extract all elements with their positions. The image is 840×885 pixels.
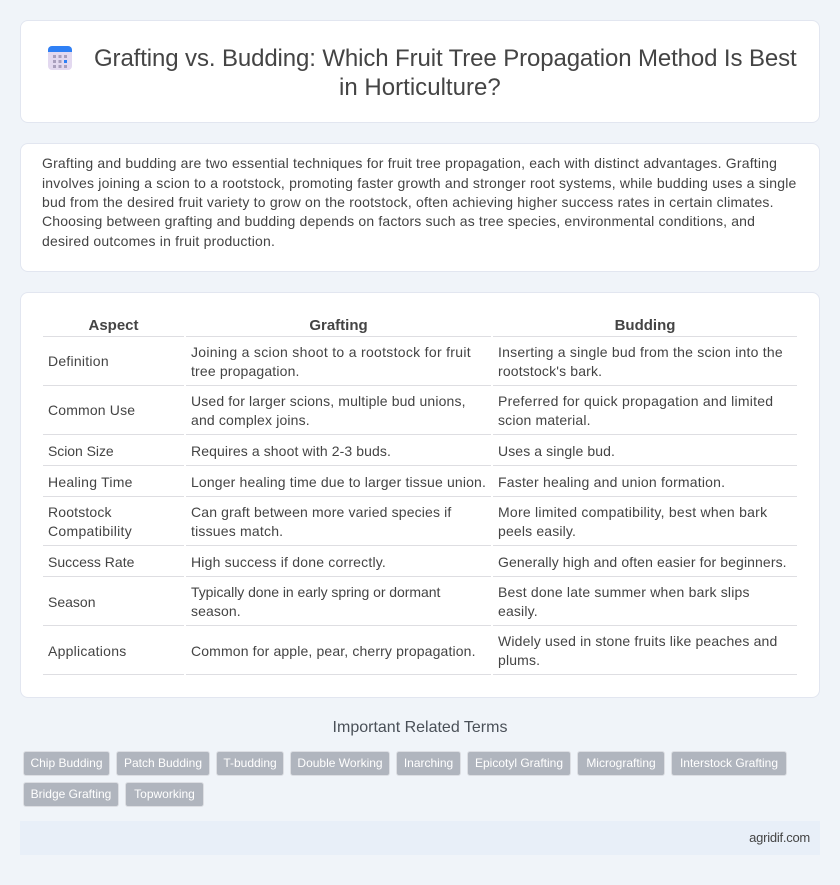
row: success rate: [48, 554, 787, 570]
row: healing time: Faster healing and union formation.: [498, 474, 725, 490]
row: definition: [48, 344, 783, 379]
table header: Grafting: [309, 317, 368, 334]
row: season: [48, 584, 750, 619]
tag list: related terms: Bridge Grafting: [31, 787, 111, 801]
row: common use: scion material.: [498, 412, 591, 428]
text block: introduction: desired outcomes in fruit production.: [42, 233, 275, 249]
title: Grafting vs. Budding: Which Fruit Tree Propagation Method Is Best: [94, 45, 797, 72]
row: rootstock compatibility: Rootstock: [48, 504, 112, 520]
tag list: related terms: Epicotyl Grafting: [475, 756, 563, 770]
row: healing time: Longer healing time due to larger tissue union.: [191, 474, 486, 490]
row: scion size: [48, 443, 615, 459]
row: definition: tree propagation.: [191, 363, 300, 379]
row: applications: Widely used in stone fruits like peaches and: [498, 633, 777, 649]
table header: [88, 317, 675, 334]
row: season: Season: [48, 594, 95, 610]
row: rootstock compatibility: [48, 504, 768, 539]
row: scion size: Requires a shoot with 2-3 buds.: [191, 443, 391, 459]
tag list: related terms: Micrografting: [586, 756, 656, 770]
tag list: related terms: Topworking: [134, 787, 195, 801]
tag list: related terms: [23, 751, 787, 807]
row: applications: Common for apple, pear, cherry propagation.: [191, 643, 476, 659]
row: definition: Joining a scion shoot to a rootstock for fruit: [191, 344, 471, 360]
tag list: related terms: Inarching: [404, 756, 453, 770]
row: scion size: Scion Size: [48, 443, 114, 459]
table header: Budding: [615, 317, 675, 334]
row: applications: Applications: [48, 643, 126, 659]
row: common use: Common Use: [48, 402, 135, 418]
table header: Aspect: [88, 317, 139, 334]
row: definition: rootstock's bark.: [498, 363, 602, 379]
heading: important related terms: Important Related Terms: [333, 719, 507, 736]
row: rootstock compatibility: peels easily.: [498, 523, 576, 539]
footer text: site name: agridif.com: [749, 830, 810, 845]
tag list: related terms: T-budding: [223, 756, 277, 770]
table: grafting vs budding comparison: [43, 317, 797, 675]
row: common use: Preferred for quick propagation and limited: [498, 393, 773, 409]
row: season: season.: [191, 603, 241, 619]
row: common use: [48, 393, 773, 428]
row: season: easily.: [498, 603, 538, 619]
row: season: Typically done in early spring or dormant: [191, 584, 440, 600]
text block: introduction: [42, 155, 797, 249]
title: in Horticulture?: [339, 74, 501, 101]
footer bar: [20, 821, 820, 855]
text block: introduction: Choosing between grafting and budding depends on factors such as tree species, environmental conditions, and: [42, 213, 755, 229]
row: definition: Definition: [48, 353, 109, 369]
row: rootstock compatibility: Compatibility: [48, 523, 132, 539]
row: rootstock compatibility: tissues match.: [191, 523, 283, 539]
title: [94, 45, 797, 101]
row: success rate: Success Rate: [48, 554, 134, 570]
row: rootstock compatibility: Can graft between more varied species if: [191, 504, 451, 520]
row: rootstock compatibility: More limited compatibility, best when bark: [498, 504, 767, 520]
row: common use: and complex joins.: [191, 412, 310, 428]
text block: introduction: Grafting and budding are two essential techniques for fruit tree propagation, each with distinct advantages. Grafting: [42, 155, 777, 171]
panel: introduction: [20, 143, 820, 272]
row: applications: [48, 633, 777, 668]
row: definition: Inserting a single bud from the scion into the: [498, 344, 783, 360]
row: success rate: Generally high and often easier for beginners.: [498, 554, 787, 570]
row: healing time: [48, 474, 725, 490]
row: healing time: Healing Time: [48, 474, 133, 490]
row: scion size: Uses a single bud.: [498, 443, 615, 459]
text block: introduction: involves joining a scion to a rootstock, promoting faster growth and stronger root systems, while budding uses a single: [42, 175, 797, 191]
row: season: Best done late summer when bark slips: [498, 584, 750, 600]
row: common use: Used for larger scions, multiple bud unions,: [191, 393, 466, 409]
icon: calendar: [48, 46, 72, 70]
panel: comparison table: [20, 292, 820, 698]
tag list: related terms: Patch Budding: [124, 756, 202, 770]
row: success rate: High success if done correctly.: [191, 554, 386, 570]
tag list: related terms: Double Working: [297, 756, 383, 770]
tag list: related terms: Chip Budding: [30, 756, 103, 770]
header panel: [20, 20, 820, 123]
tag list: related terms: Interstock Grafting: [680, 756, 778, 770]
text block: introduction: bud from the desired fruit variety to grow on the rootstock, often achieving higher success rates in certain climates.: [42, 194, 774, 210]
row: applications: plums.: [498, 652, 540, 668]
